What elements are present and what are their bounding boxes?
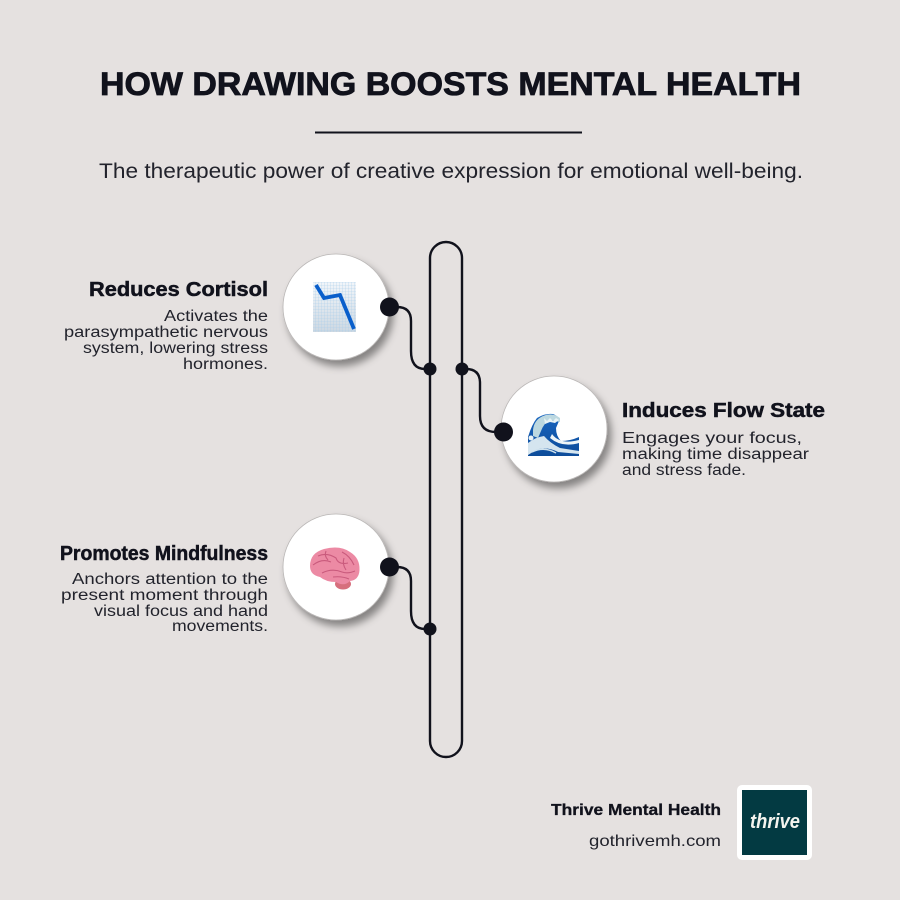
text: mindfulness description: present moment through xyxy=(61,587,268,604)
circle: cortisol xyxy=(283,254,389,360)
panel: induces flow state xyxy=(456,362,825,482)
heading: reduces cortisol: Reduces Cortisol xyxy=(89,279,268,301)
panel: reduces cortisol xyxy=(64,254,436,376)
connector: flow state xyxy=(462,369,503,432)
footer: website: gothrivemh.com xyxy=(589,833,721,850)
subtitle: The therapeutic power of creative expression for emotional well-being. xyxy=(99,160,803,183)
heading: flow state: Induces Flow State xyxy=(622,400,825,422)
icon: brain xyxy=(310,548,360,590)
heading: mindfulness: Promotes Mindfulness xyxy=(60,543,268,565)
text: reduces cortisol description: parasympathetic nervous xyxy=(64,324,268,341)
text: flow state description: Engages your focus, xyxy=(622,430,802,447)
connector: cortisol xyxy=(389,307,430,369)
text: mindfulness description xyxy=(61,571,268,635)
text: mindfulness description: visual focus and hand xyxy=(94,603,268,620)
text: reduces cortisol description xyxy=(64,308,268,373)
text: flow state description xyxy=(622,430,809,479)
text: mindfulness description: Anchors attention to the xyxy=(72,571,268,588)
dot: mindfulness xyxy=(380,558,399,576)
circle: flow state xyxy=(501,376,607,482)
connector: mindfulness xyxy=(389,567,430,629)
icon: falling chart xyxy=(313,282,356,332)
timeline pill xyxy=(430,242,462,757)
text: reduces cortisol description: hormones. xyxy=(183,356,268,373)
panel: promotes mindfulness xyxy=(60,514,436,636)
circle: mindfulness xyxy=(283,514,389,620)
footer: organisation name: Thrive Mental Health xyxy=(551,802,721,819)
node: mindfulness xyxy=(424,622,436,636)
icon: wave xyxy=(528,414,579,456)
logo: thrive xyxy=(737,785,812,860)
node: flow state xyxy=(456,362,468,376)
logo: thrive: thrive xyxy=(750,811,800,833)
text: reduces cortisol description: Activates the xyxy=(164,308,268,325)
dot: flow state xyxy=(494,422,513,442)
dot: cortisol xyxy=(380,298,399,316)
title: HOW DRAWING BOOSTS MENTAL HEALTH xyxy=(100,66,801,102)
text: flow state description: making time disappear xyxy=(622,446,809,463)
text: mindfulness description: movements. xyxy=(172,618,268,635)
node: cortisol xyxy=(424,362,436,376)
text: flow state description: and stress fade. xyxy=(622,462,746,479)
text: reduces cortisol description: system, lowering stress xyxy=(83,340,268,357)
